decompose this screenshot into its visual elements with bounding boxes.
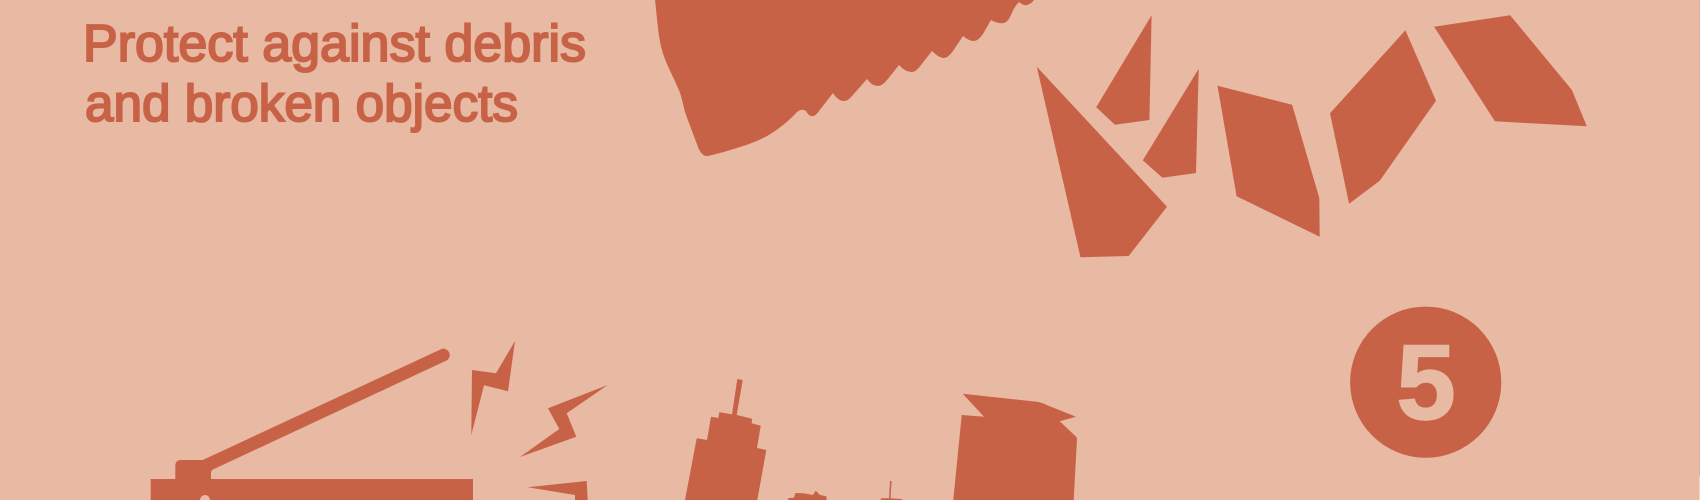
icon: glass shard far right: [1434, 15, 1587, 126]
icon: lightning spark 3: [528, 481, 588, 500]
icon: small damaged building: [787, 491, 827, 500]
icon: glass shard right: [1330, 30, 1436, 204]
heading: [83, 15, 586, 133]
icon: large glass shard: [1037, 67, 1167, 257]
heading: and broken objects: [85, 75, 518, 133]
icon: lightning spark 1: [471, 341, 515, 435]
heading: Protect against debris: [83, 15, 586, 73]
icon: small glass shard lower: [1143, 69, 1199, 178]
icon: jagged broken glass shard: [655, 0, 1034, 156]
icon: lightning spark 2: [520, 385, 608, 457]
icon: number badge 5: [1350, 307, 1501, 458]
icon: glass shard centre: [1218, 86, 1320, 237]
icon: large torn building: [953, 394, 1077, 500]
icon: number badge 5: 5: [1396, 322, 1456, 442]
icon: opening lid box: [151, 349, 473, 500]
icon: small antenna building: [881, 481, 903, 500]
icon: small glass shard upper: [1096, 15, 1152, 125]
icon: tall tower building: [685, 379, 766, 500]
